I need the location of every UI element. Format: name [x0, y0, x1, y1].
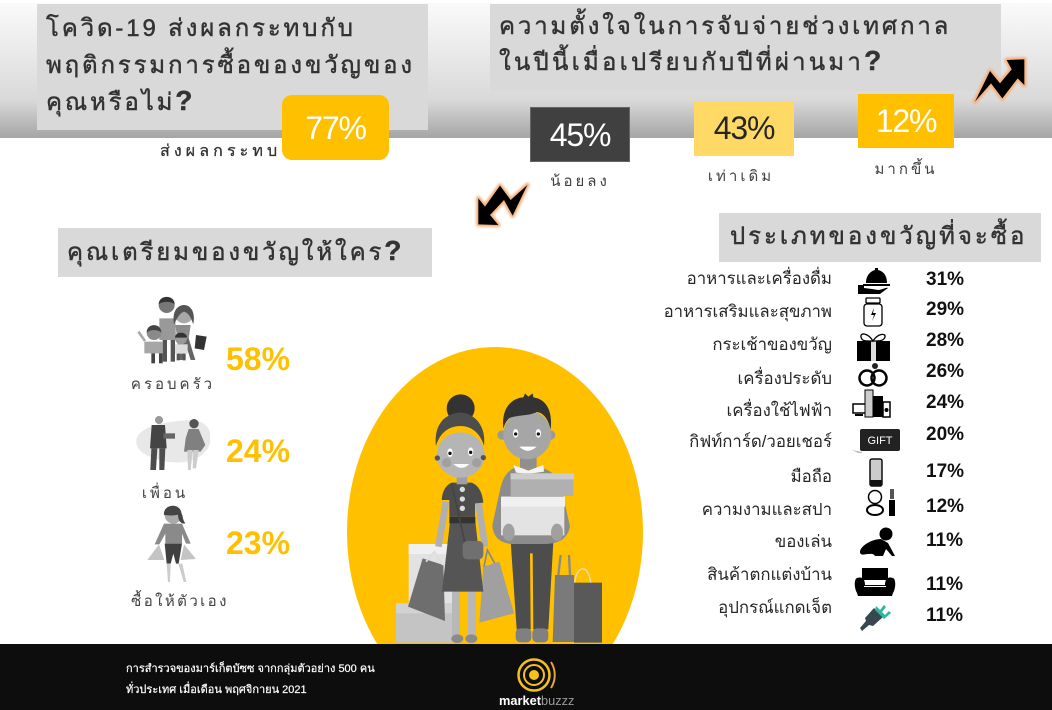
heading text: holiday spending: ในปีนี้เมื่อเปรียบกับปีที่ผ่านมา?: [499, 45, 881, 76]
heading text: covid impact: คุณหรือไม่?: [46, 85, 192, 116]
list: gift categories: สินค้าตกแต่งบ้าน: [707, 565, 832, 584]
heading text: covid impact: โควิด-19 ส่งผลกระทบกับ: [46, 15, 356, 42]
list: gift categories: [664, 266, 832, 618]
category labels: อาหารและเครื่องดื่ม: [687, 269, 832, 288]
list: gift categories: ของเล่น: [775, 532, 832, 551]
source note: [126, 661, 375, 696]
label: family: ครอบครัว: [131, 376, 215, 393]
stat: more 12 percent: 12%: [876, 103, 936, 139]
label: friends: เพื่อน: [142, 485, 188, 502]
stat: friends 24 percent: 24%: [226, 433, 290, 469]
panel: covid impact heading: [37, 4, 428, 130]
panel: who heading: [58, 228, 432, 277]
icon: up arrow: [972, 56, 1028, 105]
category percentages: 11%: [926, 530, 963, 551]
header gradient band: [0, 3, 1052, 138]
category percentages: 24%: [926, 392, 964, 413]
category percentages: 20%: [926, 424, 964, 445]
category percentages: 31%: [926, 269, 964, 290]
stat: less 45 percent: 45%: [550, 117, 610, 153]
stat: less 45 percent: [530, 107, 630, 162]
footer bar: [0, 644, 1052, 710]
list: gift categories: เครื่องใช้ไฟฟ้า: [727, 401, 832, 420]
list: gift categories: อาหารเสริมและสุขภาพ: [664, 302, 832, 321]
panel: gift type heading: [719, 213, 1041, 262]
heading text: holiday spending: [499, 8, 951, 76]
category percentages: 26%: [926, 361, 964, 382]
source note: ทั่วประเทศ เมื่อเดือน พฤศจิกายน 2021: [126, 684, 307, 696]
label: same: เท่าเดิม: [708, 168, 774, 185]
illustration: friends: [136, 416, 210, 470]
illustration: family: [137, 296, 207, 364]
logo: marketbuzzz: [499, 658, 574, 708]
stat: family 58 percent: 58%: [226, 341, 290, 377]
heading text: covid impact: พฤติกรรมการซื้อของขวัญของ: [46, 52, 415, 79]
label: affected: ส่งผลกระทบ: [160, 143, 281, 160]
label: less: น้อยลง: [550, 173, 610, 190]
category percentages: 11%: [926, 574, 963, 595]
category percentages: [926, 269, 964, 626]
list: gift categories: มือถือ: [791, 467, 832, 486]
badge: 77 percent: 77%: [305, 110, 366, 146]
heading text: covid impact: [46, 14, 415, 117]
panel: holiday spending heading: [490, 4, 1001, 91]
heading text: holiday spending: ความตั้งใจในการจับจ่ายช่วงเทศกาล: [499, 13, 951, 40]
stat: more 12 percent: [858, 94, 954, 148]
list: gift categories: อุปกรณ์แกดเจ็ต: [718, 598, 832, 617]
list: gift categories: กระเช้าของขวัญ: [712, 335, 832, 354]
category percentages: 17%: [926, 461, 964, 482]
stat: same 43 percent: [694, 101, 794, 156]
category percentages: 28%: [926, 330, 964, 351]
category percentages: 11%: [926, 605, 963, 626]
list: gift categories: เครื่องประดับ: [738, 369, 832, 388]
source note: การสำรวจของมาร์เก็ตบัซซ จากกลุ่มตัวอย่าง 500 คน: [126, 663, 375, 675]
stat: self 23 percent: 23%: [226, 525, 290, 561]
category percentages: 12%: [926, 496, 964, 517]
icons: gift categories: GIFT: [867, 435, 893, 447]
icon: down arrow: [474, 181, 531, 229]
illustration: shopping couple on yellow circle: [347, 347, 643, 644]
label: more: มากขึ้น: [875, 161, 937, 178]
stat: same 43 percent: 43%: [714, 110, 774, 146]
category percentages: 29%: [926, 299, 964, 320]
list: gift categories: ความงามและสปา: [702, 500, 832, 519]
list: gift categories: กิฟท์การ์ด/วอยเชอร์: [689, 432, 832, 451]
heading text: gift type: ประเภทของขวัญที่จะซื้อ: [730, 223, 1027, 250]
heading text: who: คุณเตรียมของขวัญให้ใคร?: [67, 235, 401, 266]
logo: marketbuzzz: marketbuzzz: [499, 693, 574, 708]
icons: gift categories: [852, 268, 900, 631]
label: self: ซื้อให้ตัวเอง: [131, 593, 229, 610]
illustration: self: [148, 506, 196, 582]
badge: 77 percent: [282, 95, 389, 160]
